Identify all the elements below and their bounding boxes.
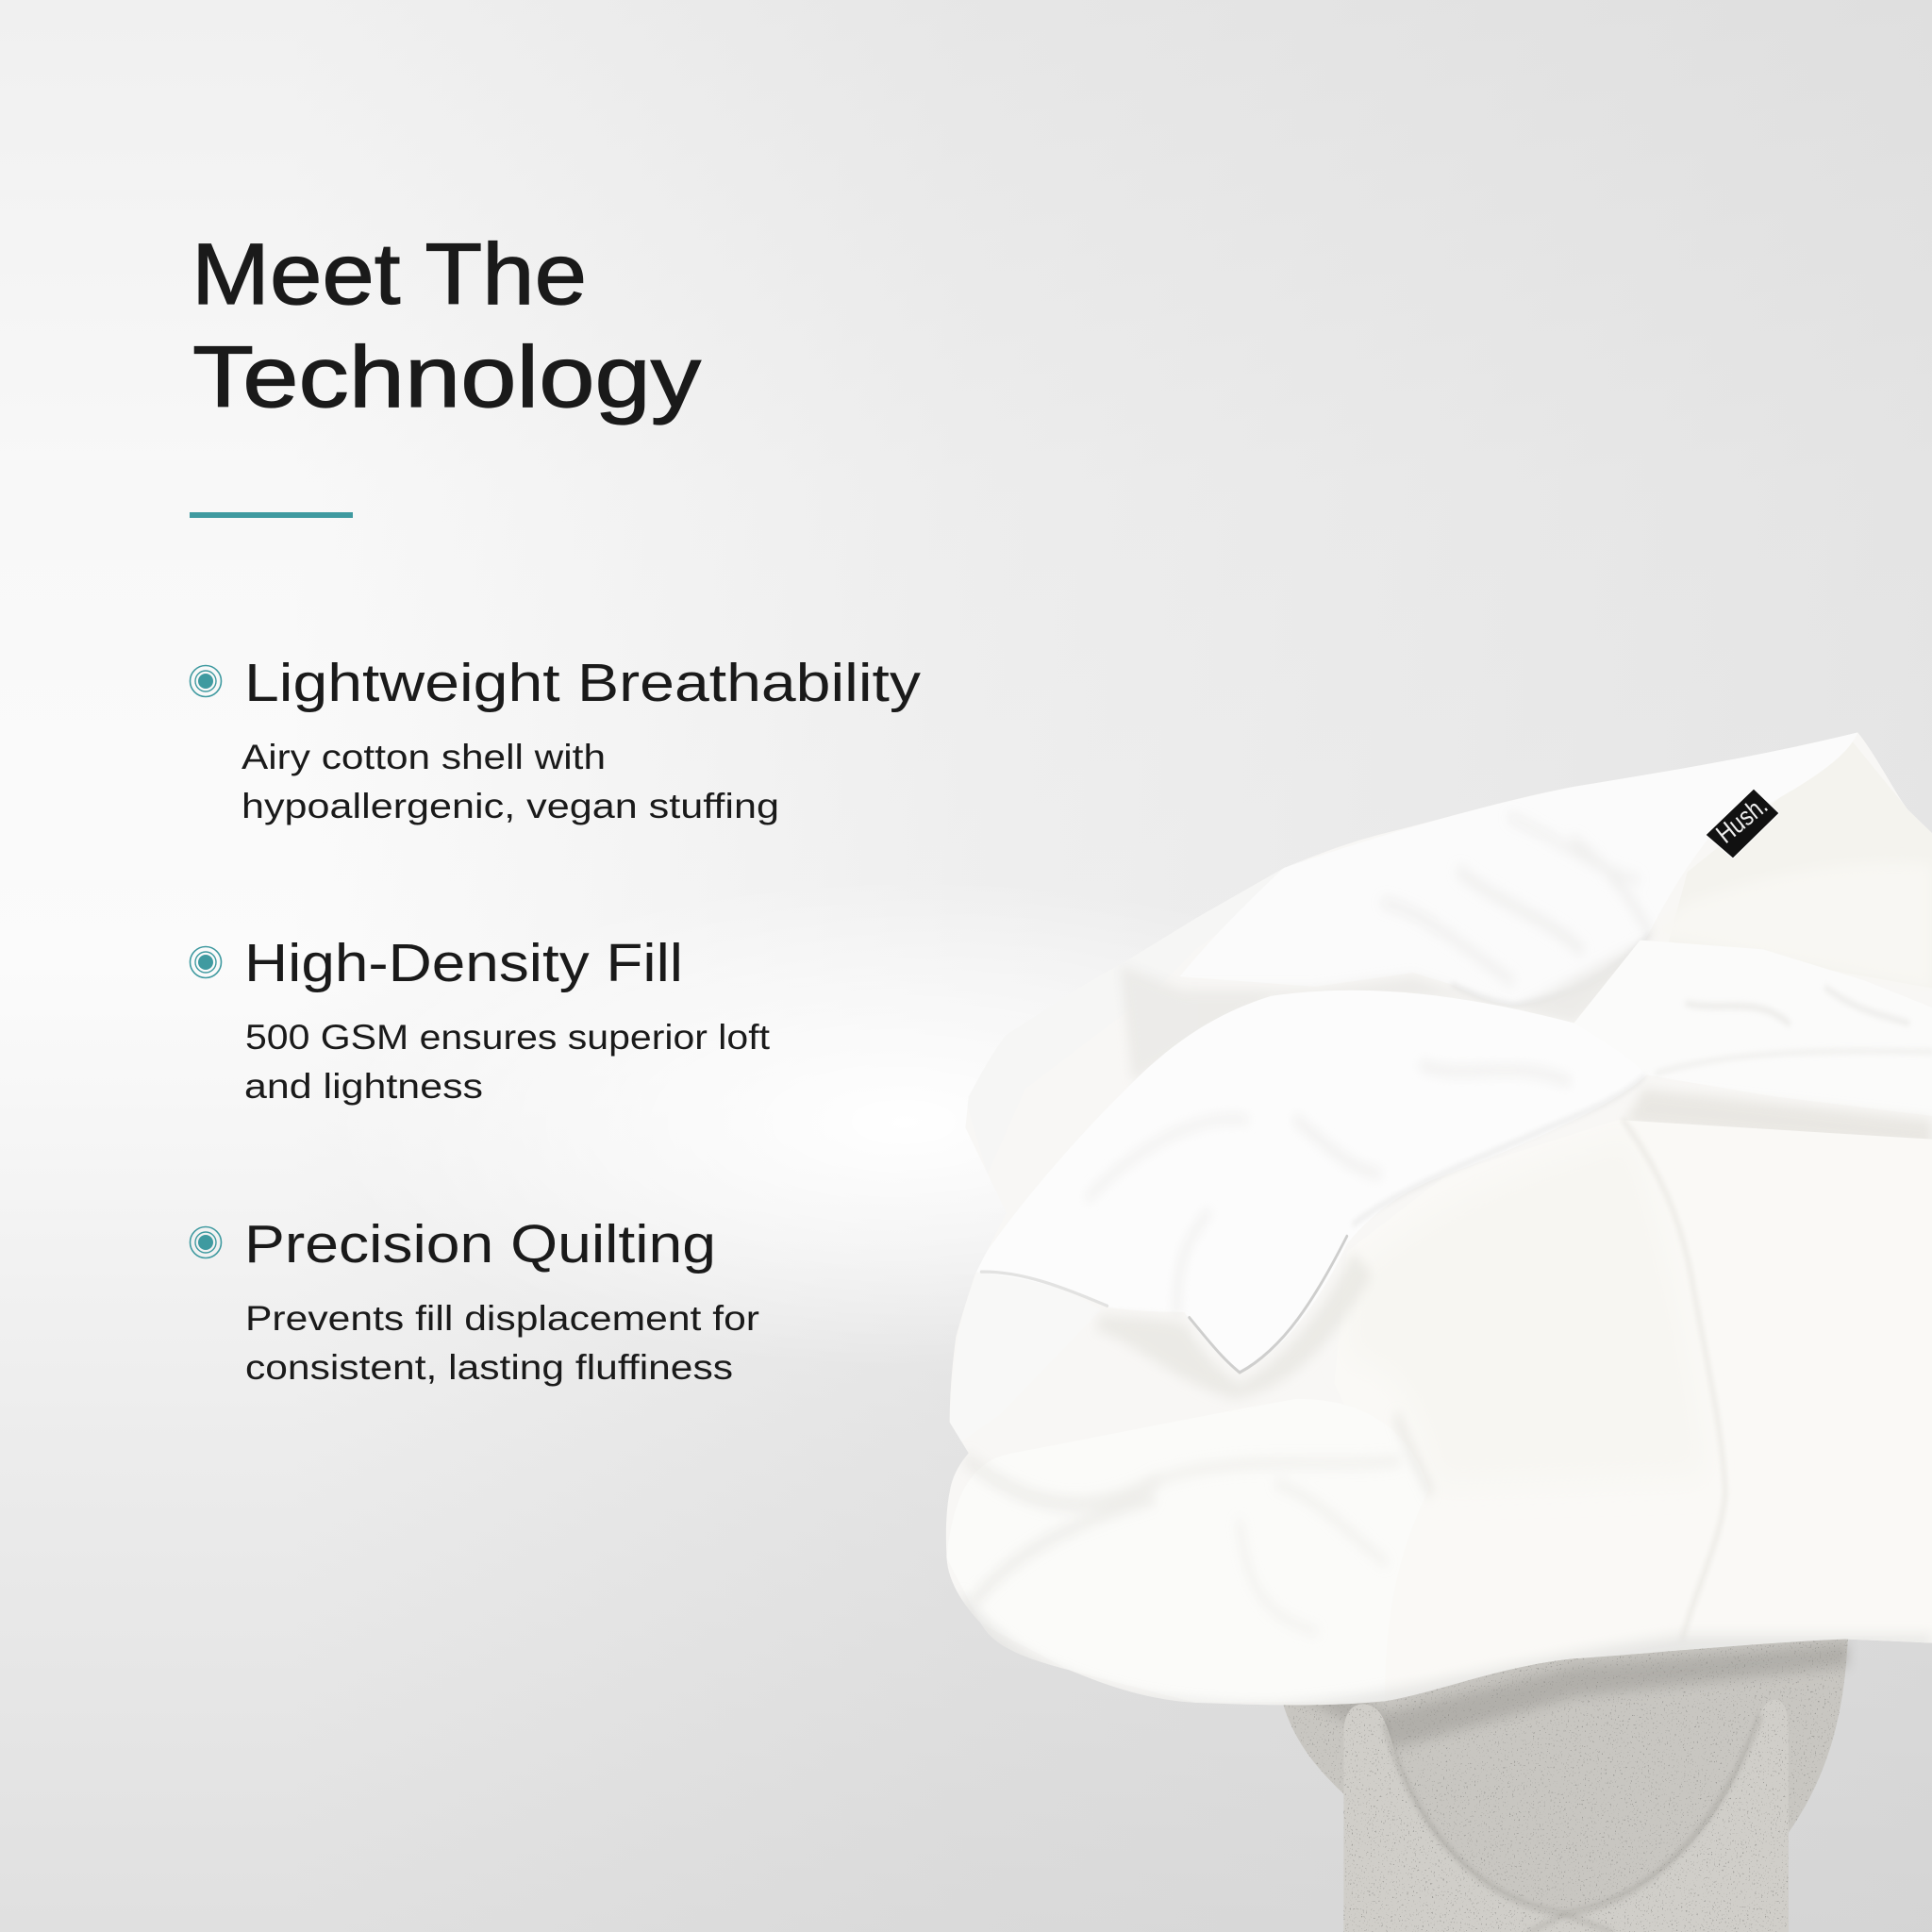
stone edge shading	[1383, 1715, 1762, 1932]
title: Meet The	[192, 226, 587, 323]
rolled fold shading	[969, 1418, 1429, 1631]
back-left fold	[962, 857, 1322, 1174]
heading: High-Density Fill: High-Density Fill	[244, 933, 683, 993]
pillow cast shadow	[1094, 1252, 1373, 1399]
underside shadow	[950, 1592, 1932, 1717]
description: Precision Quilting: consistent, lasting fluffiness	[245, 1348, 733, 1387]
description: Precision Quilting: Prevents fill displacement for	[245, 1299, 759, 1338]
title: Technology	[192, 329, 701, 425]
centre pillow wrinkles	[1089, 1066, 1568, 1314]
centre pillow	[974, 991, 1646, 1373]
description: High-Density Fill	[244, 1018, 771, 1106]
quilting seams	[1429, 1120, 1932, 1640]
stone pedestal with curved cut-out	[1343, 1700, 1789, 1932]
stone shadow under duvet	[1274, 1643, 1848, 1748]
description: Lightweight Breathability: Airy cotton shell with	[242, 738, 606, 776]
title accent rule	[190, 512, 353, 518]
duvet	[943, 717, 1932, 1724]
centre pillow piping	[981, 1076, 1644, 1373]
right inner cream fold	[1669, 741, 1932, 989]
icon: teal target bullet	[191, 947, 221, 977]
product illustration: duvet on concrete stand	[943, 717, 1932, 1932]
feature: Lightweight Breathability	[191, 653, 922, 825]
feature: High-Density Fill	[191, 933, 771, 1106]
concrete stand	[1274, 1624, 1848, 1932]
icon: teal target bullet	[191, 1226, 221, 1258]
title	[192, 226, 701, 425]
top flap	[1782, 741, 1853, 796]
description: High-Density Fill: 500 GSM ensures superior loft	[245, 1018, 771, 1057]
front panel	[1322, 1120, 1932, 1701]
seam shadow between flap and pillow	[1123, 951, 1626, 1074]
description: High-Density Fill: and lightness	[244, 1067, 483, 1106]
description: Lightweight Breathability: hypoallergenic, vegan stuffing	[242, 787, 779, 825]
description: Lightweight Breathability	[242, 738, 779, 825]
stone bowl	[1283, 1640, 1847, 1911]
icon: teal target bullet	[191, 666, 221, 696]
hush label: Hush.	[1710, 791, 1773, 849]
heading: Lightweight Breathability: Lightweight Breathability	[244, 653, 922, 713]
lower-left fold	[950, 1271, 1101, 1445]
right pillow	[1574, 941, 1828, 1024]
feature: Precision Quilting	[191, 1214, 759, 1387]
description: Precision Quilting	[245, 1299, 759, 1387]
rolled lower fold	[946, 1399, 1429, 1703]
top flap wrinkles	[1464, 841, 1626, 947]
heading: Precision Quilting: Precision Quilting	[244, 1214, 716, 1274]
